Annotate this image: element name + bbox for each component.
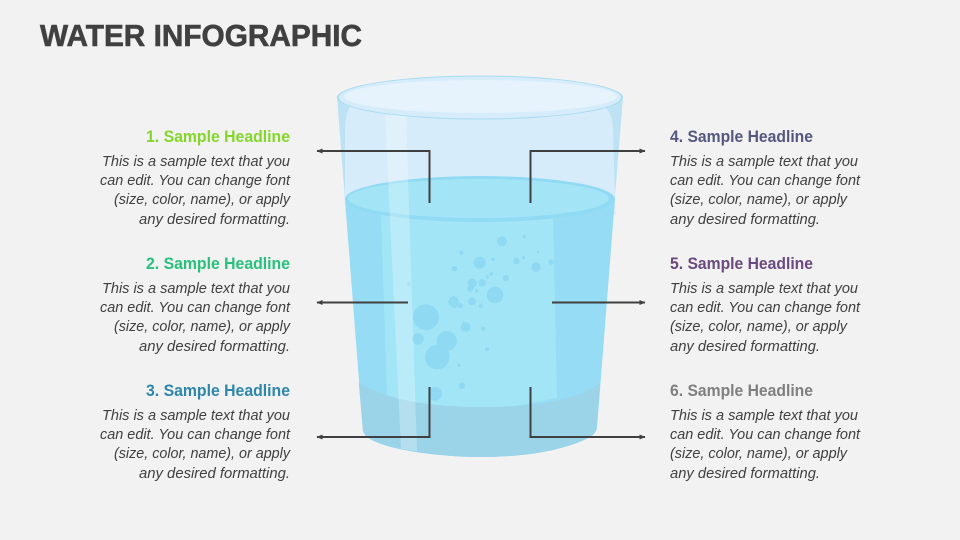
text block 1	[100, 128, 291, 228]
text block 3: This is a sample text that you	[102, 408, 290, 424]
text block 3: (size, color, name), or apply	[114, 446, 291, 462]
glass outer body	[337, 97, 623, 457]
title: WATER INFOGRAPHIC	[40, 18, 362, 53]
connector 4	[530, 151, 645, 203]
connector 3	[317, 387, 430, 437]
text block 5: can edit. You can change font	[670, 300, 861, 316]
text block 6: This is a sample text that you	[670, 408, 858, 424]
glass highlight	[385, 115, 417, 451]
water glass illustration	[337, 76, 623, 457]
glass rim	[337, 76, 623, 120]
text block 4: (size, color, name), or apply	[670, 192, 848, 208]
text block 1: (size, color, name), or apply	[114, 192, 291, 208]
text block 3: any desired formatting.	[139, 466, 290, 482]
text block 4: can edit. You can change font	[670, 173, 861, 189]
text block 6: any desired formatting.	[670, 466, 820, 482]
text block 1: This is a sample text that you	[102, 154, 290, 170]
text block 5: 5. Sample Headline	[670, 255, 813, 273]
text block 1: can edit. You can change font	[100, 173, 291, 189]
text block 2: (size, color, name), or apply	[114, 319, 291, 335]
connector 5	[552, 302, 645, 304]
text block 3: 3. Sample Headline	[146, 382, 290, 400]
text block 2	[100, 255, 291, 355]
water body	[345, 198, 615, 457]
text block 4: This is a sample text that you	[670, 154, 858, 170]
text block 5: (size, color, name), or apply	[670, 319, 848, 335]
text block 6	[670, 382, 861, 482]
text block 2: any desired formatting.	[139, 339, 290, 355]
connector 6	[530, 387, 645, 437]
water surface	[345, 176, 615, 222]
text block 6: (size, color, name), or apply	[670, 446, 848, 462]
text block 6: 6. Sample Headline	[670, 382, 813, 400]
text block 3	[100, 382, 291, 482]
text block 1: any desired formatting.	[139, 212, 290, 228]
text block 4	[670, 128, 861, 228]
connector 2	[317, 302, 408, 304]
connector 1	[317, 151, 430, 203]
text block 4: 4. Sample Headline	[670, 128, 813, 146]
bubbles	[407, 235, 554, 401]
text block 4: any desired formatting.	[670, 212, 820, 228]
text block 2: 2. Sample Headline	[146, 255, 290, 273]
glass base	[359, 383, 600, 457]
glass inner pane	[345, 106, 616, 215]
text block 3: can edit. You can change font	[100, 427, 291, 443]
text block 6: can edit. You can change font	[670, 427, 861, 443]
text block 5: any desired formatting.	[670, 339, 820, 355]
text block 5	[670, 255, 861, 355]
text block 5: This is a sample text that you	[670, 281, 858, 297]
text block 2: can edit. You can change font	[100, 300, 291, 316]
water lighter centre	[381, 215, 557, 407]
text block 1: 1. Sample Headline	[146, 128, 290, 146]
text block 2: This is a sample text that you	[102, 281, 290, 297]
